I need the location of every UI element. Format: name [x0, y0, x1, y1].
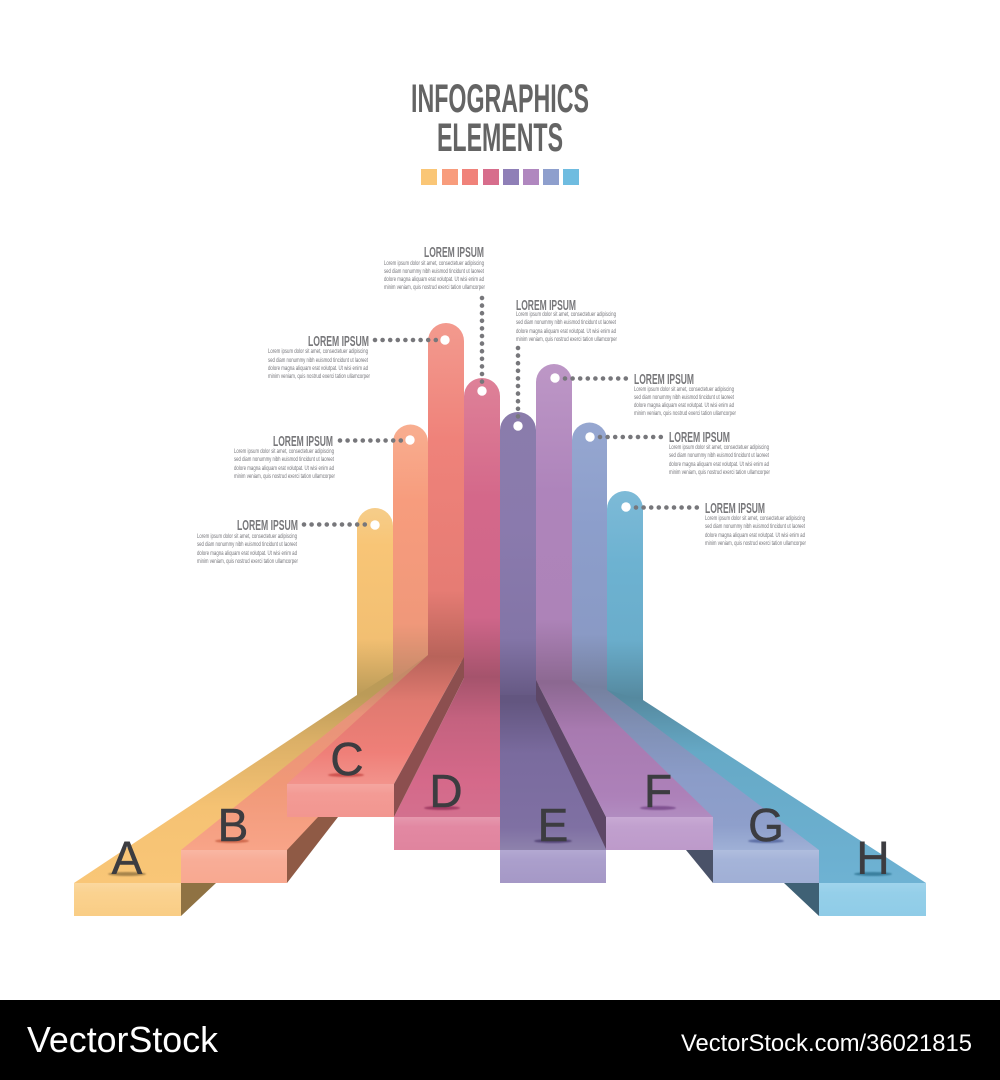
text block H: Lorem ipsum dolor sit amet, consectetuer adipiscing	[705, 515, 805, 522]
bar C	[287, 323, 464, 817]
text block F: Lorem ipsum dolor sit amet, consectetuer adipiscing	[634, 386, 734, 393]
text block E: LOREM IPSUM	[516, 298, 576, 314]
bar A	[74, 508, 393, 916]
text block F: minim veniam, quis nostrud exerci tation ullamcorper	[634, 410, 737, 417]
text block D: Lorem ipsum dolor sit amet, consectetuer adipiscing	[384, 260, 484, 267]
text block C	[268, 334, 371, 380]
colour legend squares	[421, 169, 579, 185]
text block F: LOREM IPSUM	[634, 372, 694, 388]
footer band	[0, 1000, 1000, 1080]
text block B: LOREM IPSUM	[273, 434, 333, 450]
text block H	[705, 501, 807, 547]
title	[411, 77, 589, 160]
text block G: dolore magna aliquam erat volutpat. Ut wisi enim ad	[669, 461, 769, 468]
text block E: Lorem ipsum dolor sit amet, consectetuer adipiscing	[516, 311, 616, 318]
text block B: minim veniam, quis nostrud exerci tation ullamcorper	[234, 473, 336, 480]
letter labels A to H: E	[538, 799, 568, 851]
text block H: dolore magna aliquam erat volutpat. Ut wisi enim ad	[705, 532, 805, 539]
text block A: Lorem ipsum dolor sit amet, consectetuer adipiscing	[197, 533, 297, 540]
text block H: minim veniam, quis nostrud exerci tation ullamcorper	[705, 540, 807, 547]
bar H	[607, 491, 926, 916]
text block G: sed diam nonummy nibh euismod tincidunt ut laoreet	[669, 452, 769, 459]
text block E: dolore magna aliquam erat volutpat. Ut wisi enim ad	[516, 328, 616, 335]
letter labels A to H: H	[856, 832, 890, 884]
text block B: Lorem ipsum dolor sit amet, consectetuer adipiscing	[234, 448, 334, 455]
bar F	[536, 364, 713, 850]
footer band: VectorStock.com/36021815	[681, 1030, 972, 1057]
text block C: LOREM IPSUM	[308, 334, 369, 350]
undersides of steps	[181, 817, 819, 916]
text block B	[234, 434, 336, 480]
dotted leader lines	[304, 298, 698, 524]
text block A: LOREM IPSUM	[237, 518, 298, 534]
text block A: minim veniam, quis nostrud exerci tation ullamcorper	[197, 558, 299, 565]
letter labels A to H: D	[429, 765, 463, 817]
text block D: dolore magna aliquam erat volutpat. Ut wisi enim ad	[384, 276, 484, 283]
text block A	[197, 518, 299, 565]
bar D	[394, 378, 500, 850]
text block C: dolore magna aliquam erat volutpat. Ut wisi enim ad	[268, 365, 368, 372]
footer band: VectorStock	[27, 1019, 219, 1060]
text block G: LOREM IPSUM	[669, 430, 730, 446]
text block G: Lorem ipsum dolor sit amet, consectetuer adipiscing	[669, 444, 769, 451]
text block D: LOREM IPSUM	[424, 245, 484, 261]
letter labels A to H: A	[112, 832, 143, 884]
text block C: minim veniam, quis nostrud exerci tation ullamcorper	[268, 373, 371, 380]
text block B: dolore magna aliquam erat volutpat. Ut wisi enim ad	[234, 465, 334, 472]
letter labels A to H: B	[218, 799, 248, 851]
text block A: dolore magna aliquam erat volutpat. Ut wisi enim ad	[197, 550, 297, 557]
text block H: sed diam nonummy nibh euismod tincidunt ut laoreet	[705, 523, 805, 530]
text block G: minim veniam, quis nostrud exerci tation ullamcorper	[669, 469, 771, 476]
title: INFOGRAPHICS	[411, 77, 589, 121]
title: ELEMENTS	[437, 116, 563, 160]
bar E	[500, 412, 606, 883]
text block E	[516, 298, 618, 343]
letter labels A to H: F	[644, 765, 672, 817]
text block F: sed diam nonummy nibh euismod tincidunt ut laoreet	[634, 394, 734, 401]
text block B: sed diam nonummy nibh euismod tincidunt ut laoreet	[234, 456, 334, 463]
letter labels A to H	[112, 733, 890, 884]
bar B	[181, 424, 428, 883]
text block D	[384, 245, 486, 291]
bar G	[572, 422, 819, 883]
text block E: sed diam nonummy nibh euismod tincidunt ut laoreet	[516, 319, 616, 326]
text block G	[669, 430, 771, 476]
text block F: dolore magna aliquam erat volutpat. Ut wisi enim ad	[634, 402, 734, 409]
text block C: Lorem ipsum dolor sit amet, consectetuer adipiscing	[268, 348, 368, 355]
text block D: sed diam nonummy nibh euismod tincidunt ut laoreet	[384, 268, 484, 275]
text block A: sed diam nonummy nibh euismod tincidunt ut laoreet	[197, 541, 297, 548]
letter labels A to H: C	[330, 733, 364, 785]
letter shadows	[108, 773, 892, 876]
text block H: LOREM IPSUM	[705, 501, 765, 517]
letter labels A to H: G	[748, 799, 784, 851]
text block D: minim veniam, quis nostrud exerci tation ullamcorper	[384, 284, 486, 291]
text block F	[634, 372, 737, 417]
white marker circles	[370, 335, 631, 530]
text block C: sed diam nonummy nibh euismod tincidunt ut laoreet	[268, 357, 368, 364]
text block E: minim veniam, quis nostrud exerci tation ullamcorper	[516, 336, 618, 343]
